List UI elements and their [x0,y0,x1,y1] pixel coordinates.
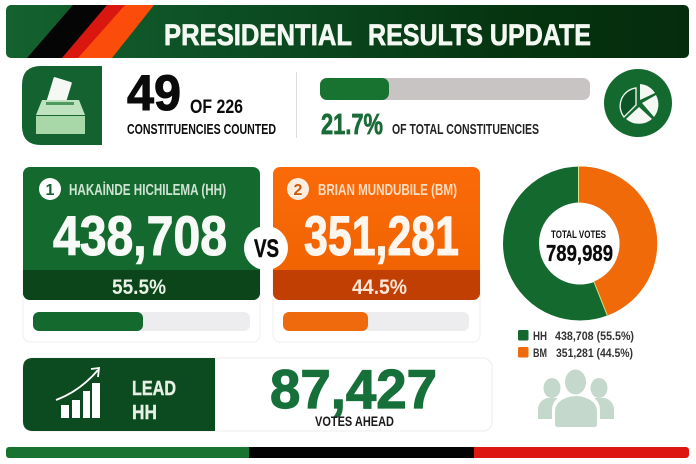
title: PRESIDENTIAL [164,19,352,52]
VS badge: VS [254,235,279,263]
lead label: LEAD [132,378,176,400]
title: RESULTS UPDATE [368,19,591,52]
candidate number 1 [39,178,61,200]
percent of total constituencies [321,109,539,141]
constituencies counted: 49 [127,65,181,121]
vote share: 55.5% [112,276,166,299]
icon: people [538,370,614,427]
title [164,19,591,52]
VS badge [244,226,288,270]
lead label: HH [132,402,157,424]
share bar [33,312,250,331]
panel: Mundubile [273,167,480,342]
progress bar: constituencies [320,78,590,100]
candidate number 1: 1 [46,182,55,199]
constituencies counted: CONSTITUENCIES COUNTED [127,121,276,138]
lead figure: 87,427 [270,358,437,420]
flag colour bar [6,447,689,458]
legend: 351,281 (44.5%) [556,346,633,360]
panel: lead [23,358,492,431]
legend: 438,708 (55.5%) [555,329,634,343]
lead label [132,378,176,424]
percent of total constituencies: OF TOTAL CONSTITUENCIES [392,121,539,138]
votes ahead caption: VOTES AHEAD [315,413,394,429]
donut centre label: 789,989 [546,240,613,266]
candidate name: HAKAİNDE HICHILEMA (HH) [69,182,226,199]
constituencies counted [127,65,276,138]
share bar [283,312,469,331]
percent of total constituencies: 21.7% [321,109,383,141]
donut chart [521,166,657,316]
vote count: 351,281 [304,204,459,267]
vote share: 44.5% [352,276,407,299]
vote count: 438,708 [53,204,227,267]
constituencies counted: OF 226 [190,97,243,118]
donut centre label [546,229,613,266]
candidate number 2 [287,178,309,200]
icon: rising bar chart [56,368,100,418]
panel: Hichilema [23,167,260,342]
legend: BM [533,346,547,360]
legend [518,329,634,360]
icon: pie chart [604,69,672,137]
legend: HH [533,329,547,343]
candidate name: BRIAN MUNDUBILE (BM) [318,182,457,199]
candidate number 2: 2 [294,182,303,199]
header banner [6,5,689,58]
donut centre label: TOTAL VOTES [551,229,606,241]
icon: ballot box [22,66,102,145]
